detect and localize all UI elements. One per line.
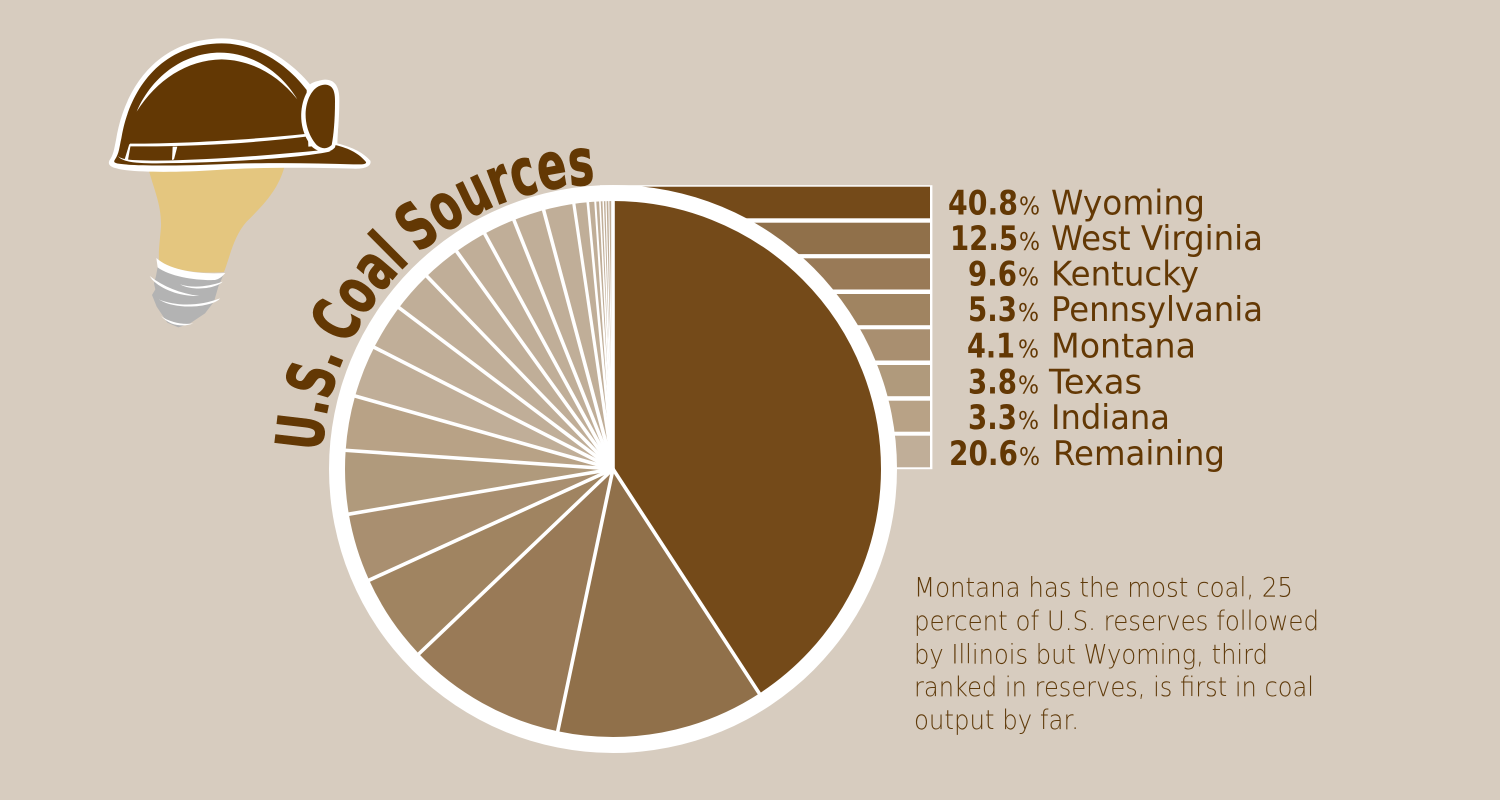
legend row: West Virginia: % — [1019, 227, 1040, 256]
legend row: Kentucky: % — [1018, 263, 1039, 292]
pie separators — [345, 200, 760, 732]
text block: reserves note: Montana has the most coal, 25 — [914, 573, 1293, 604]
bar: Remaining — [600, 436, 930, 467]
legend row: Remaining: Remaining — [1053, 434, 1225, 473]
title: curved heading: U.S. Coal Sources — [274, 148, 593, 447]
text block: reserves note: ranked in reserves, is first in coal — [914, 672, 1314, 703]
legend row: Indiana: 3.3 — [968, 398, 1017, 437]
helmet band — [129, 134, 306, 146]
legend row: Montana: Montana — [1051, 326, 1196, 365]
legend row: West Virginia: West Virginia — [1051, 219, 1263, 258]
legend row: Montana: 4.1 — [967, 326, 1015, 365]
legend row: Pennsylvania: Pennsylvania — [1051, 290, 1263, 329]
pie chart: coal share by state — [329, 185, 897, 753]
bar legend strips — [600, 185, 932, 469]
bar: Pennsylvania — [600, 294, 930, 325]
legend row: Pennsylvania — [968, 290, 1263, 329]
bar: Texas — [600, 365, 930, 396]
legend row: Indiana: Indiana — [1051, 398, 1170, 437]
helmet highlight arc — [137, 53, 297, 112]
bar: Kentucky — [600, 258, 930, 290]
icon: bulb screw base — [150, 258, 225, 327]
icon: helmet — [109, 38, 371, 172]
legend row: Montana: % — [1018, 334, 1039, 363]
legend row: Remaining — [949, 434, 1225, 473]
legend row: Wyoming: Wyoming — [1051, 183, 1205, 222]
legend row: Texas: % — [1018, 370, 1039, 399]
legend row: Remaining: % — [1019, 442, 1040, 471]
legend row: Texas: Texas — [1048, 362, 1142, 401]
text block: reserves note — [914, 573, 1319, 736]
pie slices — [479, 335, 747, 603]
bar: West Virginia — [600, 223, 930, 254]
legend row: Wyoming: % — [1019, 191, 1040, 220]
legend row: Wyoming — [948, 183, 1205, 222]
icon: miner helmet on light bulb — [109, 38, 371, 327]
bar: Montana — [600, 329, 930, 360]
legend row: West Virginia — [950, 219, 1263, 258]
legend row: Remaining: 20.6 — [949, 434, 1018, 473]
bar: Indiana — [600, 401, 930, 432]
helmet lamp — [301, 80, 339, 152]
legend row: West Virginia: 12.5 — [950, 219, 1018, 258]
text block: reserves note: percent of U.S. reserves followed — [914, 606, 1319, 637]
legend row: Kentucky: 9.6 — [968, 255, 1017, 294]
legend row: Texas — [968, 362, 1142, 401]
legend row: Kentucky: Kentucky — [1051, 255, 1199, 294]
icon: light bulb glass — [148, 166, 285, 273]
text block: reserves note: by Illinois but Wyoming, third — [914, 639, 1268, 670]
legend row: Montana — [967, 326, 1196, 365]
legend row: Texas: 3.8 — [968, 362, 1017, 401]
legend row: Kentucky — [968, 255, 1199, 294]
legend row: Indiana — [968, 398, 1170, 437]
legend row: Wyoming: 40.8 — [948, 183, 1018, 222]
legend row: Pennsylvania: 5.3 — [968, 290, 1017, 329]
text block: reserves note: output by far. — [914, 705, 1079, 736]
legend row: Pennsylvania: % — [1018, 298, 1039, 327]
bar: Wyoming — [600, 187, 930, 218]
pie outer ring — [329, 185, 897, 753]
legend row: Indiana: % — [1018, 406, 1039, 435]
legend: state percentages — [948, 183, 1263, 473]
